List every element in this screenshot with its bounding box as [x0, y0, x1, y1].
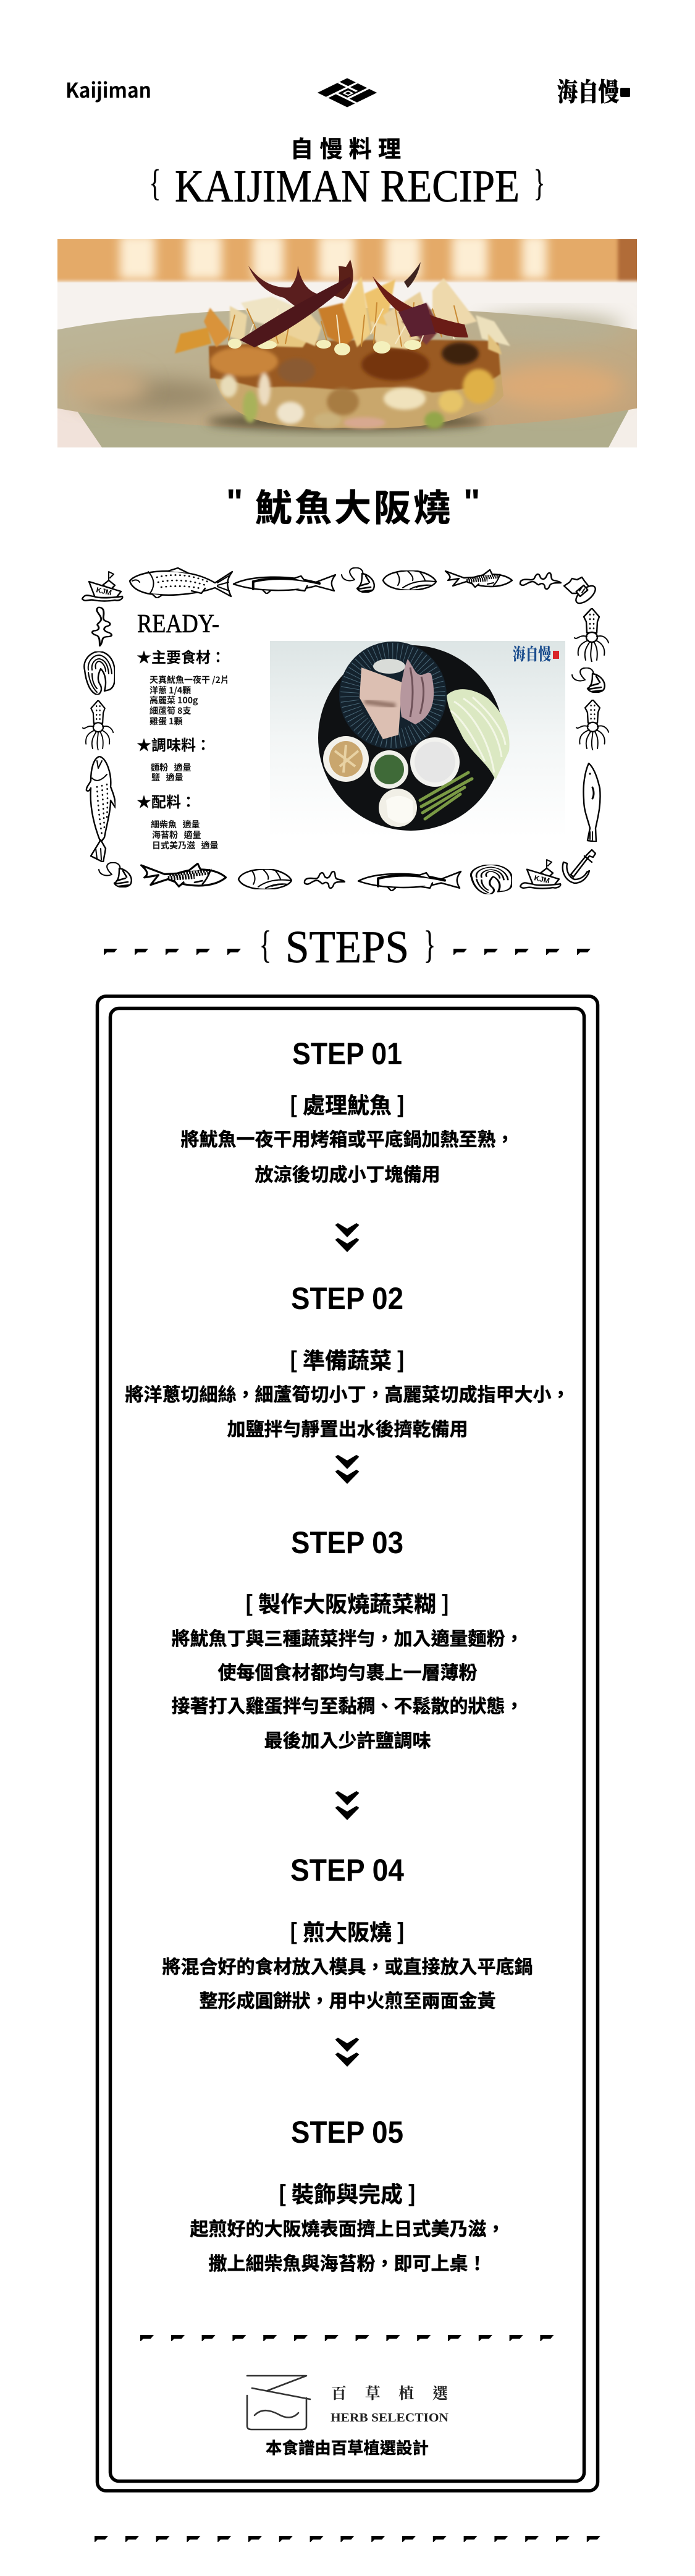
list: toppings: 細柴魚 適量 [151, 818, 200, 831]
divider: bottom dashes [95, 2536, 600, 2542]
subheading: main ingredients: ★主要食材： [137, 645, 225, 667]
step title: [ 準備蔬菜 ] [289, 1343, 405, 1375]
title: KAIJIMAN RECIPE: KAIJIMAN RECIPE [175, 161, 520, 212]
toppings [175, 276, 510, 355]
photo: finished squid okonomiyaki on plate [57, 239, 637, 447]
step text: 起煎好的大阪燒表面擠上日式美乃滋， [190, 2214, 505, 2241]
step 03 [172, 1525, 524, 1753]
subheading: toppings: ★配料： [137, 790, 196, 811]
list: main ingredients: 天真魷魚一夜干 /2片 [150, 674, 229, 686]
icon: trout [86, 756, 116, 862]
brand text: 百草植選: 百草植選 [331, 2381, 450, 2404]
photo: ingredients on black plate: 海自慢 [513, 641, 551, 665]
icon: seaweed bottom [305, 871, 345, 888]
step text: 加鹽拌勻靜置出水後擠乾備用 [227, 1414, 468, 1441]
list: toppings [151, 818, 219, 852]
list: toppings: 海苔粉 適量 [152, 829, 201, 841]
icon: diamond logo [318, 78, 377, 108]
step text: 將洋蔥切細絲，細蘆筍切小丁，高麗菜切成指甲大小， [125, 1379, 570, 1407]
step number: STEP 04 [290, 1853, 404, 1888]
step 02 [125, 1281, 570, 1441]
list: main ingredients [150, 674, 229, 727]
arrow: step 3 to 4 [335, 1791, 360, 1820]
heading text: { [259, 924, 271, 966]
step text [172, 1624, 524, 1753]
icon: mackerel bottom [358, 871, 461, 891]
credit line: 本食譜由百草植選設計 [266, 2434, 429, 2459]
icon: fish fillet [383, 570, 436, 590]
panel: outer frame [98, 996, 598, 2491]
step text: 撒上細柴魚與海苔粉，即可上桌！ [209, 2248, 487, 2276]
dish title: 魷魚大阪燒: " [226, 482, 243, 522]
icon: squid [83, 700, 113, 750]
icon: shrimp bottom [99, 863, 132, 887]
brand logo: calligraphy with stamp: 海自慢 [557, 72, 619, 108]
step text: 將魷魚一夜干用烤箱或平底鍋加熱至熟， [180, 1124, 514, 1151]
panel: ingredient frame with sea-creature border [82, 568, 609, 894]
icon: striped fish bottom [141, 863, 226, 886]
step text [125, 1379, 570, 1441]
step title: [ 製作大阪燒蔬菜糊 ] [245, 1587, 450, 1619]
step title: [ 處理魷魚 ] [289, 1088, 405, 1120]
heading: READY-: READY- [137, 610, 219, 638]
list: seasoning [151, 761, 192, 784]
icon: Herb Selection logo mark [247, 2376, 310, 2430]
list: main ingredients: 雞蛋 1顆 [150, 715, 182, 727]
list: main ingredients: 洋蔥 1/4顆 [150, 684, 191, 697]
title: KAIJIMAN RECIPE: } [534, 163, 545, 203]
arrow: step 2 to 3 [335, 1455, 360, 1484]
divider: right dashes [453, 949, 591, 955]
list: seasoning: 鹽 適量 [151, 771, 183, 784]
subheading: seasoning: ★調味料： [137, 733, 211, 755]
brand name: Kaijiman: Kaijiman [65, 74, 151, 104]
arrow: step 1 to 2 [335, 1223, 360, 1252]
divider: left dashes [104, 949, 241, 955]
photo: ingredients on black plate [270, 641, 565, 837]
icon: boat bottom: KJM [533, 873, 550, 885]
icon: seaweed vertical [92, 608, 112, 646]
heading text: STEPS [285, 922, 409, 973]
icon: salmon [130, 568, 232, 598]
divider: dashes inside frame [140, 2335, 554, 2341]
step text: 整形成圓餅狀，用中火煎至兩面金黃 [199, 1986, 495, 2013]
icon: mackerel [234, 575, 335, 594]
step text [180, 1124, 514, 1187]
cake body [209, 341, 503, 428]
step text: 最後加入少許鹽調味 [264, 1726, 431, 1753]
step number: STEP 02 [291, 1281, 403, 1316]
arrow: step 4 to 5 [335, 2038, 360, 2067]
heading text: } [424, 924, 436, 966]
heading: 自慢料理: 自慢料理 [290, 130, 401, 164]
step title: [ 裝飾與完成 ] [278, 2177, 416, 2209]
icon: boat: KJM [95, 585, 112, 597]
icon: boat [82, 572, 122, 601]
step text: 將魷魚丁與三種蔬菜拌勻，加入適量麵粉， [172, 1624, 524, 1651]
ingredient list [137, 645, 229, 852]
dish title: 魷魚大阪燒: 魷魚大阪燒 [255, 478, 450, 532]
icon: shrimp [342, 568, 374, 592]
step text: 將混合好的食材放入模具，或直接放入平底鍋 [162, 1952, 533, 1979]
icon: striped fish [445, 570, 512, 587]
step 05 [190, 2115, 505, 2276]
list: main ingredients: 高麗菜 100g [150, 694, 198, 706]
icon: fish steak [84, 651, 115, 695]
dish title: 魷魚大阪燒: " [463, 482, 481, 522]
step text: 接著打入雞蛋拌勻至黏稠、不鬆散的狀態， [172, 1691, 524, 1718]
step 01 [180, 1036, 514, 1187]
icon: fillet bottom [238, 869, 292, 889]
step text: 放涼後切成小丁塊備用 [255, 1159, 440, 1187]
icon: shrimp right [572, 668, 605, 692]
title: KAIJIMAN RECIPE: { [150, 163, 161, 203]
icon: seaweed [520, 573, 561, 589]
icon: vertical fish [583, 763, 600, 842]
icon: shell [564, 577, 598, 606]
icon: squid right [575, 608, 609, 662]
icon: anchor [563, 850, 596, 883]
step title: [ 煎大阪燒 ] [289, 1915, 405, 1947]
squid tentacles [240, 260, 468, 347]
step number: STEP 03 [291, 1525, 403, 1560]
brand text: HERB SELECTION: HERB SELECTION [331, 2411, 449, 2425]
panel: inner frame [110, 1009, 584, 2481]
icon: boat bottom [520, 860, 560, 889]
step text [162, 1952, 533, 2013]
list: main ingredients: 細蘆筍 8支 [150, 705, 191, 717]
icon: squid right lower [576, 700, 609, 750]
step number: STEP 01 [292, 1036, 402, 1071]
icon: fish steak bottom [471, 865, 512, 894]
step text: 使每個食材都均勻裹上一層薄粉 [217, 1658, 477, 1685]
step text [190, 2214, 505, 2276]
step number: STEP 05 [291, 2115, 403, 2150]
section heading: STEPS [104, 922, 591, 973]
list: seasoning: 麵粉 適量 [151, 761, 192, 774]
step 04 [162, 1853, 533, 2013]
list: toppings: 日式美乃滋 適量 [152, 839, 219, 852]
